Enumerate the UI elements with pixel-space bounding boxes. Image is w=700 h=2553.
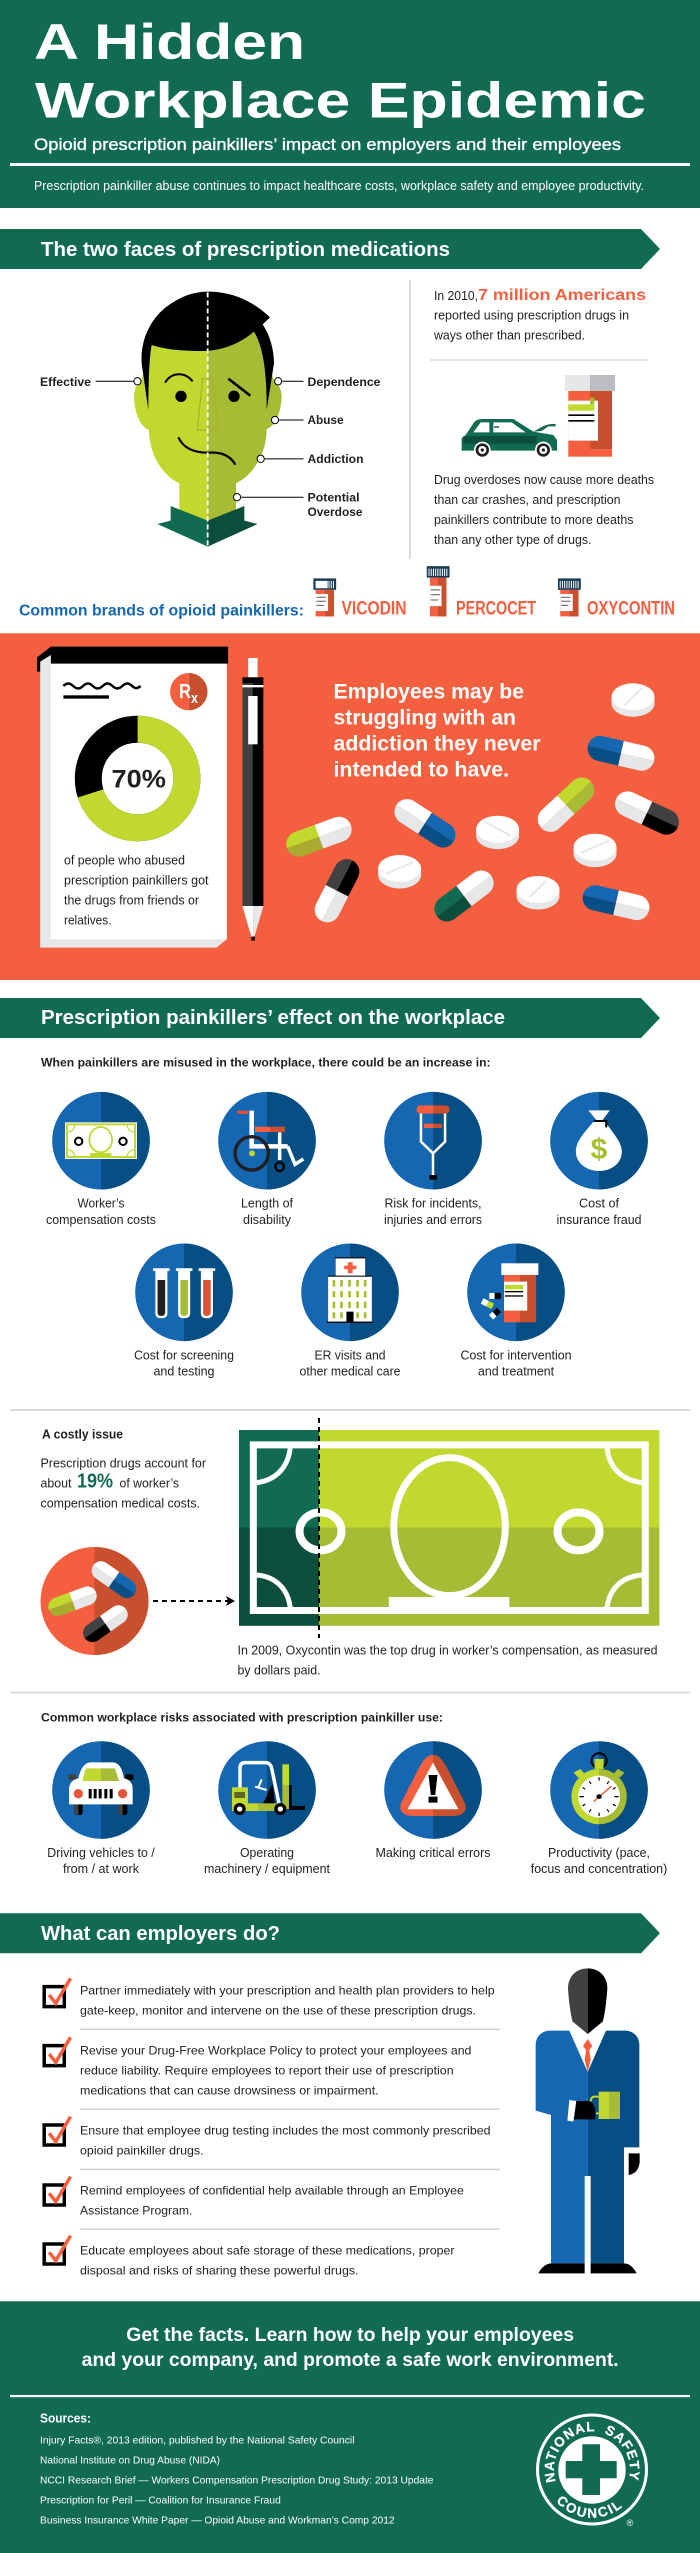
sources: Sources:: [40, 2411, 91, 2426]
logo: national safety council: ®: [627, 2518, 634, 2528]
section banner: effect on the workplace: [0, 998, 660, 1038]
checklist item 5: [44, 2236, 455, 2277]
caption: worker's compensation costs: [46, 1197, 156, 1227]
section banner: two faces: The two faces of prescription medications: [41, 239, 450, 261]
text: drug overdoses: [434, 473, 654, 547]
checklist item 2: reduce liability. Require employees to report their use of prescription: [80, 2063, 454, 2077]
caption: productivity: focus and concentration): [531, 1862, 667, 1876]
caption: intervention and treatment: and treatment: [478, 1365, 555, 1379]
caption: 70% of people: relatives.: [64, 913, 112, 927]
logo: national safety council: NATIONAL SAFETY: [544, 2422, 640, 2483]
checklist: [44, 1978, 500, 2277]
icon: rx symbol: R: [179, 681, 193, 703]
caption: screening and testing: Cost for screening: [134, 1349, 234, 1363]
caption: 70% of people: [64, 853, 209, 927]
icon group: productivity: [531, 1741, 667, 1876]
subheading: increase in: When painkillers are misused in the workplace, there could be an increase in:: [41, 1056, 491, 1070]
text: a costly issue: [40, 1427, 206, 1510]
panel: footer: [0, 2301, 700, 2553]
checklist item 1: Partner immediately with your prescription and health plan providers to help: [80, 1983, 495, 1997]
face callouts: [40, 375, 381, 519]
checklist item 2: Revise your Drug-Free Workplace Policy to protect your employees and: [80, 2043, 471, 2057]
checklist item 2: medications that can cause drowsiness or impairment.: [80, 2083, 379, 2097]
icon: rx symbol: x: [191, 690, 199, 707]
caption: forklift: [204, 1846, 331, 1876]
label: potential overdose: Overdose: [308, 505, 363, 519]
stat: 7 million Americans: reported using prescription drugs in: [434, 308, 629, 322]
caption: 70% of people: prescription painkillers got: [64, 873, 209, 887]
dollar sign: $: [591, 1133, 608, 1166]
caption: length of disability: disability: [243, 1213, 292, 1227]
panel: header: [0, 0, 700, 208]
text: oxycontin: In 2009, Oxycontin was the top drug in worker’s compensation, as measured: [238, 1643, 658, 1657]
icon group: forklift: [204, 1741, 331, 1876]
caption: driving: from / at work: [63, 1862, 140, 1876]
caption: forklift: Operating: [240, 1846, 294, 1860]
icon group: er visits: [300, 1244, 401, 1379]
headline: employees may be struggling: Employees may be: [334, 681, 524, 704]
headline: employees may be struggling: struggling with an: [334, 706, 516, 729]
section banner: what can employers do: What can employers do?: [41, 1923, 280, 1945]
sources: Business Insurance White Paper — Opioid Abuse and Workman’s Comp 2012: [40, 2514, 395, 2526]
checklist item 4: Assistance Program.: [80, 2203, 192, 2217]
caption: worker's compensation costs: Worker’s: [78, 1197, 124, 1211]
caption: er visits: ER visits and: [314, 1349, 386, 1363]
icon group: intervention and treatment: [460, 1244, 572, 1379]
stat: 19%: 19%: [77, 1470, 113, 1492]
illustration: two-sided face: [134, 292, 282, 547]
caption: screening and testing: [134, 1349, 234, 1379]
checklist item 3: opioid painkiller drugs.: [80, 2143, 204, 2157]
arrow: pills to bill: [153, 1596, 235, 1606]
checklist item 5: Educate employees about safe storage of these medications, proper: [80, 2243, 455, 2257]
caption: forklift: machinery / equipment: [204, 1862, 331, 1876]
text: drug overdoses: painkillers contribute to more deaths: [434, 513, 634, 527]
icon group: worker's compensation costs: [46, 1092, 156, 1227]
panel: orange addiction band: [0, 633, 700, 980]
caption: risk for incidents: Risk for incidents,: [384, 1197, 482, 1211]
icon group: length of disability: [218, 1092, 316, 1227]
title: Workplace Epidemic: [35, 72, 646, 128]
label: potential overdose: [308, 490, 363, 519]
caption: risk for incidents: injuries and errors: [384, 1213, 482, 1227]
label: effective: Effective: [40, 375, 91, 389]
donut chart: 70%: 70%: [112, 766, 166, 794]
icon: percocet bottle: [427, 566, 450, 616]
checklist item 1: [44, 1978, 495, 2017]
scattered capsules: [283, 733, 683, 927]
panel: common brands: [19, 566, 675, 620]
text: a costly issue: Prescription drugs account for: [40, 1456, 206, 1470]
caption: 70% of people: the drugs from friends or: [64, 893, 199, 907]
text: a costly issue: of worker’s: [120, 1476, 179, 1490]
text: a costly issue: about: [40, 1476, 72, 1490]
subtitle: Opioid prescription painkillers’ impact on employers and their employees: [34, 136, 621, 154]
checklist item 4: [44, 2177, 464, 2217]
caption: worker's compensation costs: compensation costs: [46, 1213, 156, 1227]
icon: crashed car: [462, 419, 557, 458]
intro text: Prescription painkiller abuse continues to impact healthcare costs, workplace safety and employee productivity.: [34, 179, 644, 193]
label: dependence: Dependence: [308, 375, 381, 389]
sources: NCCI Research Brief — Workers Compensation Prescription Drug Study: 2013 Update: [40, 2474, 434, 2486]
notepad with 70% statistic: [37, 647, 228, 948]
section banner: effect on the workplace: Prescription painkillers’ effect on the workplace: [41, 1007, 505, 1029]
icon group: critical errors: [376, 1741, 490, 1860]
caption: productivity: Productivity (pace,: [548, 1846, 650, 1860]
logo: national safety council: [536, 2414, 648, 2528]
icon: pill bottle: [565, 375, 615, 457]
checklist item 4: Remind employees of confidential help available through an Employee: [80, 2183, 464, 2197]
icon: oxycontin bottle: [558, 578, 581, 616]
caption: cost of insurance fraud: [556, 1197, 642, 1227]
checklist item 1: gate-keep, monitor and intervene on the use of these prescription drugs.: [80, 2003, 476, 2017]
caption: critical errors: Making critical errors: [376, 1846, 490, 1860]
caption: driving: Driving vehicles to /: [47, 1846, 155, 1860]
call to action: [82, 2325, 619, 2371]
text: a costly issue: compensation medical costs.: [40, 1496, 200, 1510]
text: oxycontin: by dollars paid.: [238, 1663, 320, 1677]
brand: percocet: PERCOCET: [456, 598, 536, 620]
brand: oxycontin: OXYCONTIN: [587, 598, 675, 620]
stat: 7 million Americans: [433, 287, 646, 342]
illustration: businessman: [536, 1968, 640, 2273]
text: a costly issue: A costly issue: [42, 1427, 123, 1442]
illustration: dollar bill: [239, 1418, 659, 1638]
label: abuse: Abuse: [308, 413, 344, 427]
caption: er visits: other medical care: [300, 1365, 401, 1379]
icon group: driving: [47, 1741, 155, 1876]
caption: driving: [47, 1846, 155, 1876]
sources: Prescription for Peril — Coalition for Insurance Fraud: [40, 2494, 281, 2506]
scattered tablets: [378, 683, 654, 910]
stat: 7 million Americans: 7 million Americans: [478, 287, 646, 304]
caption: 70% of people: of people who abused: [64, 853, 185, 867]
heading: common brands: Common brands of opioid painkillers:: [19, 602, 304, 620]
headline: employees may be struggling: addiction they never: [334, 732, 540, 755]
call to action: and your company, and promote a safe work environment.: [82, 2350, 619, 2371]
title: A Hidden: [34, 14, 305, 70]
sources: Injury Facts®, 2013 edition, published by the National Safety Council: [40, 2434, 354, 2446]
checklist item 3: [44, 2117, 491, 2157]
icon group: cost of insurance fraud: [550, 1092, 648, 1227]
title: [34, 14, 646, 128]
icon: pen: [242, 658, 263, 941]
sources: [40, 2411, 434, 2526]
caption: cost of insurance fraud: Cost of: [579, 1197, 620, 1211]
checklist item 2: [44, 2037, 471, 2097]
headline: employees may be struggling: [334, 681, 540, 781]
text: drug overdoses: than car crashes, and prescription: [434, 493, 621, 507]
brand: vicodin: VICODIN: [342, 598, 406, 620]
caption: productivity: [531, 1846, 667, 1876]
caption: length of disability: [241, 1197, 294, 1227]
logo: national safety council: COUNCIL: [558, 2496, 622, 2518]
icon: pills circle: [40, 1547, 148, 1655]
checklist item 5: disposal and risks of sharing these powerful drugs.: [80, 2263, 358, 2277]
caption: intervention and treatment: Cost for intervention: [460, 1349, 572, 1363]
section banner: two faces: [0, 229, 660, 269]
text: oxycontin: [238, 1643, 658, 1677]
caption: risk for incidents: [384, 1197, 482, 1227]
stat: 7 million Americans: ways other than prescribed.: [433, 328, 585, 342]
stat: 7 million Americans: In 2010,: [434, 289, 478, 303]
checklist item 3: Ensure that employee drug testing includes the most commonly prescribed: [80, 2123, 491, 2137]
headline: employees may be struggling: intended to have.: [334, 758, 509, 781]
donut chart: 70%: [88, 729, 187, 828]
call to action: Get the facts. Learn how to help your employees: [126, 2325, 574, 2346]
label: addiction: Addiction: [308, 452, 364, 466]
caption: length of disability: Length of: [241, 1197, 294, 1211]
text: drug overdoses: than any other type of drugs.: [434, 533, 592, 547]
icon group: screening and testing: [134, 1244, 234, 1379]
caption: cost of insurance fraud: insurance fraud: [556, 1213, 642, 1227]
caption: intervention and treatment: [460, 1349, 572, 1379]
section banner: what can employers do: [0, 1913, 660, 1953]
caption: er visits: [300, 1349, 401, 1379]
caption: screening and testing: and testing: [154, 1365, 215, 1379]
icon: vicodin bottle: [313, 578, 336, 616]
sources: National Institute on Drug Abuse (NIDA): [40, 2454, 220, 2466]
icon group: risk for incidents: [384, 1092, 482, 1227]
subheading: common workplace risks: Common workplace risks associated with prescription painkiller use:: [41, 1711, 443, 1725]
label: potential overdose: Potential: [308, 490, 360, 504]
text: drug overdoses: Drug overdoses now cause more deaths: [434, 473, 654, 487]
